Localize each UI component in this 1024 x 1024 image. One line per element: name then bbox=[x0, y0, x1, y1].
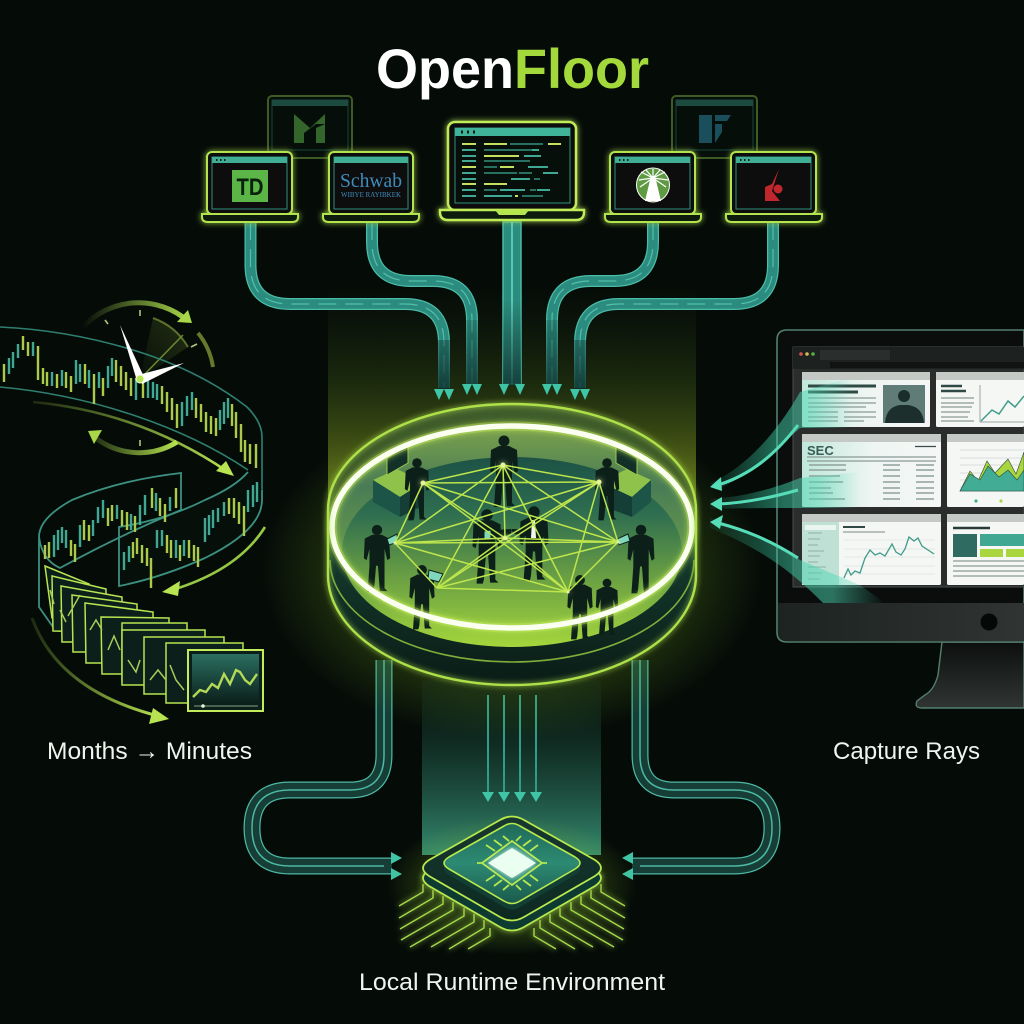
frames stack bbox=[45, 566, 243, 703]
arrow: sweep to ribbon bbox=[33, 402, 228, 472]
panel: area chart bbox=[947, 434, 1024, 507]
clock pivot bbox=[136, 375, 144, 383]
laptop: back left bbox=[268, 96, 352, 158]
pipe shading bbox=[438, 300, 586, 390]
logo: red bbox=[765, 169, 782, 201]
stand bbox=[916, 642, 1024, 708]
ray funnel: middle bbox=[710, 472, 860, 509]
SEC heading: SEC bbox=[807, 443, 834, 458]
laptop: Schwab bbox=[323, 152, 419, 222]
frame charts bbox=[50, 590, 184, 690]
central disk: collaboration floor bbox=[328, 404, 696, 685]
lower light beam bbox=[422, 680, 601, 855]
laptop: back right bbox=[672, 96, 757, 158]
clock sweep bbox=[140, 318, 188, 379]
white tie bbox=[531, 520, 536, 538]
clock arrowheads bbox=[88, 310, 192, 444]
chip bbox=[387, 815, 637, 955]
arrowheads into disk bbox=[434, 384, 590, 400]
label: months to minutes: Months → Minutes bbox=[47, 738, 252, 765]
white ring core bbox=[332, 426, 692, 628]
white ring glow bbox=[332, 426, 692, 628]
panel: line chart top bbox=[936, 372, 1024, 427]
disk body bbox=[328, 404, 696, 685]
ray funnel: top bbox=[710, 378, 850, 490]
left desk bbox=[373, 445, 424, 517]
logo: M bbox=[294, 114, 325, 143]
chip pins bbox=[399, 884, 625, 949]
ribbon candles: lower bbox=[124, 482, 257, 588]
logo: Schwab: WIBYE RAYIBKEK bbox=[341, 190, 402, 199]
arrowhead bbox=[149, 708, 169, 724]
label: capture rays: Capture Rays bbox=[833, 738, 980, 765]
ribbon band three bbox=[39, 473, 181, 627]
arrowhead bbox=[162, 581, 180, 596]
monitor bbox=[777, 330, 1024, 708]
screen bbox=[793, 347, 1024, 587]
clock hands bbox=[120, 325, 184, 384]
chip plate bbox=[444, 824, 580, 904]
title: OpenFloor bbox=[376, 37, 649, 100]
chip glow bbox=[387, 815, 637, 955]
panel: dashboard blocks bbox=[947, 514, 1024, 585]
logo: T bbox=[699, 115, 731, 143]
chip base lip bbox=[423, 826, 601, 930]
chip core frame bbox=[482, 841, 542, 885]
glass rim bbox=[328, 404, 696, 510]
logo: Schwab: Schwab bbox=[340, 171, 402, 192]
floor bbox=[342, 457, 682, 647]
disk glow bbox=[262, 400, 762, 740]
mid lime band bbox=[330, 560, 694, 662]
right desk bbox=[600, 445, 651, 517]
chip plate side bbox=[444, 830, 580, 910]
people silhouettes bbox=[364, 436, 654, 639]
node glows bbox=[394, 462, 620, 594]
lower pipes: disk to chip bbox=[252, 660, 772, 866]
ray funnel: bottom bbox=[710, 518, 885, 603]
chip core light bbox=[488, 848, 536, 878]
clock ticks bbox=[105, 310, 197, 446]
panel: profile bbox=[802, 372, 930, 427]
terminal code lines bbox=[462, 144, 561, 196]
beam arrows bbox=[482, 695, 542, 802]
chip core traces bbox=[477, 836, 547, 890]
browser chrome bbox=[793, 347, 1024, 369]
laptop: TD bbox=[202, 152, 298, 222]
logo: Fidelity bbox=[636, 168, 670, 202]
network links bbox=[395, 465, 618, 592]
center pipe bbox=[503, 222, 521, 384]
laptop: center terminal bbox=[440, 122, 584, 220]
clock sweep line bbox=[140, 335, 183, 379]
clock arcs bbox=[82, 303, 213, 453]
tablets bbox=[387, 530, 630, 582]
panel: price chart bbox=[802, 514, 941, 585]
ray arrowheads bbox=[710, 477, 723, 529]
label: local runtime environment: Local Runtime Environment bbox=[359, 969, 665, 996]
laptop: red logo bbox=[726, 152, 822, 222]
ribbon top band bbox=[0, 327, 262, 490]
outer lime outline bbox=[328, 404, 696, 685]
capture rays bbox=[710, 378, 885, 603]
upper pipes: laptops to disk bbox=[250, 222, 773, 388]
panel: SEC filing bbox=[802, 434, 941, 507]
arrowheads into chip bbox=[391, 852, 633, 880]
ribbon candles: top bbox=[4, 336, 256, 468]
ray arrow shafts bbox=[718, 425, 798, 558]
front frame bbox=[188, 650, 263, 711]
arrow: frames sweep bbox=[32, 618, 158, 716]
ribbon candles: middle bbox=[45, 488, 176, 562]
clock and timeline bbox=[0, 303, 265, 724]
chip top face bbox=[423, 816, 601, 920]
inner well bbox=[330, 425, 694, 629]
monitor body bbox=[777, 330, 1024, 642]
monitor chin bbox=[778, 603, 1024, 641]
arms shaking hands bbox=[495, 529, 546, 540]
central light beam bbox=[328, 285, 696, 560]
ribbon band two bbox=[119, 472, 262, 586]
logo: TD: TD bbox=[236, 174, 264, 201]
arrowhead bbox=[216, 461, 234, 476]
power button bbox=[980, 614, 998, 630]
laptop: Fidelity bbox=[605, 152, 701, 222]
arrow: curved down bbox=[172, 527, 265, 590]
